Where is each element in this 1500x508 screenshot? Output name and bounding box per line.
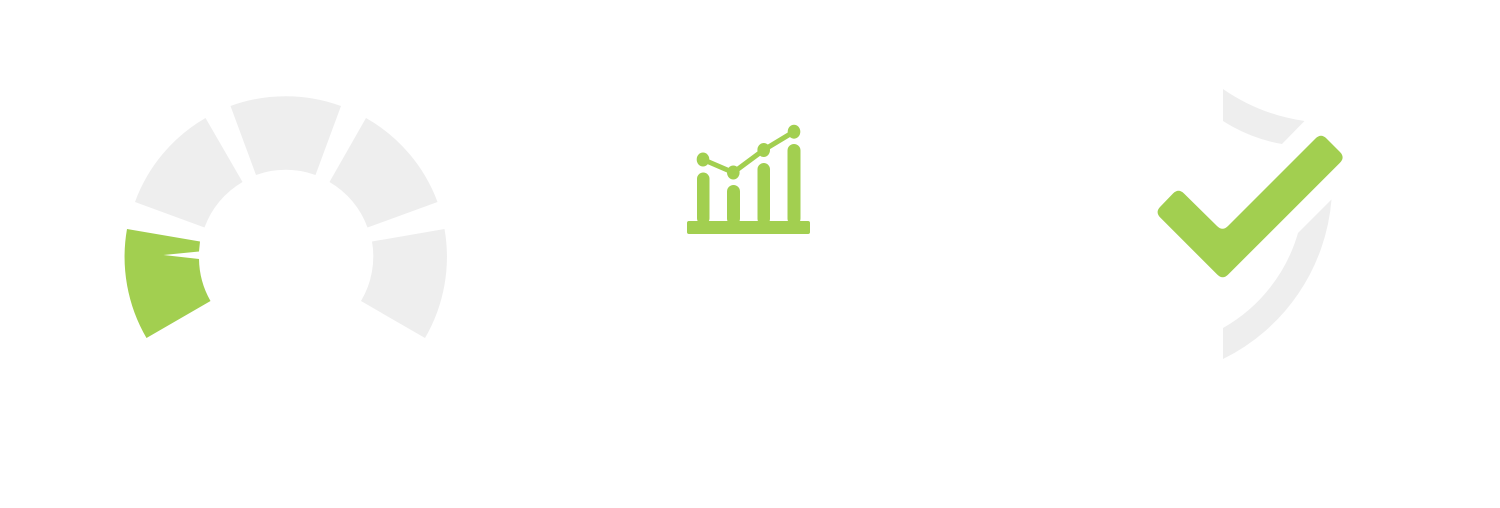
icon: shield with check mark	[1158, 89, 1343, 359]
gauge segment 2	[135, 118, 242, 228]
bar 4	[788, 144, 800, 225]
shield lower fragment	[1223, 200, 1332, 359]
trend point 2	[727, 166, 740, 180]
gauge segment 5	[361, 229, 447, 338]
check mark	[1158, 136, 1343, 277]
trend line	[703, 132, 794, 172]
trend point 3	[757, 143, 770, 157]
chart baseline	[687, 221, 810, 234]
icon: growth bar chart	[687, 125, 810, 234]
bar 3	[758, 163, 770, 225]
icon: gauge	[125, 96, 447, 338]
trend point 1	[697, 152, 709, 166]
bar 1	[697, 172, 710, 224]
bar 2	[727, 185, 740, 225]
gauge segment 4	[330, 118, 438, 228]
shield upper fragment	[1223, 89, 1304, 144]
gauge segment 3	[230, 96, 341, 175]
trend point 4	[788, 125, 800, 139]
gauge segment 1: active green	[125, 229, 210, 338]
